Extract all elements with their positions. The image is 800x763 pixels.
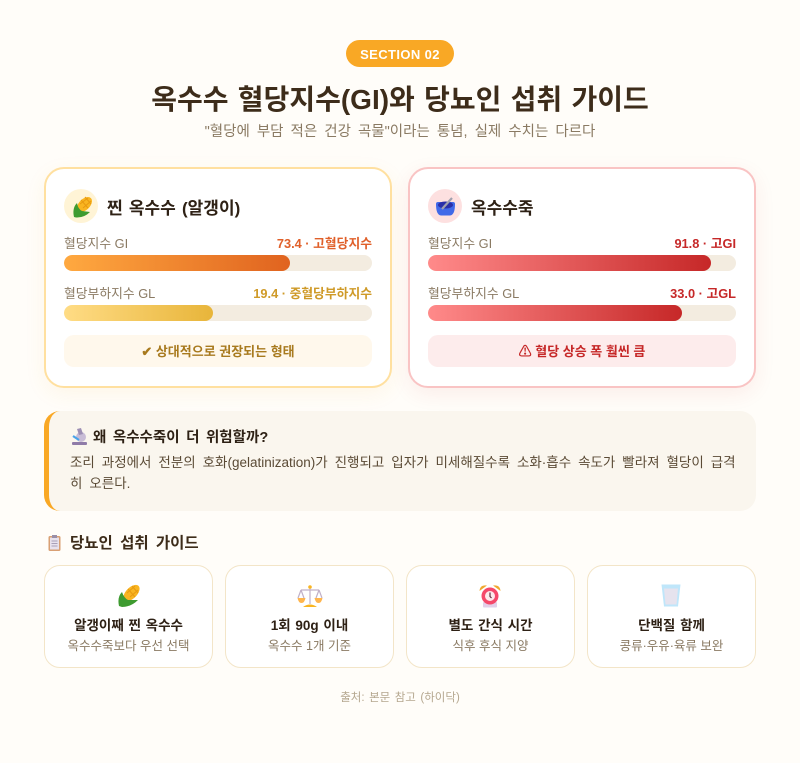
icon: corn bbox=[118, 584, 140, 607]
source note: 출처: 본문 참고 (하이닥) bbox=[340, 692, 460, 704]
GI bar bbox=[428, 255, 736, 271]
guide card: kernels bbox=[44, 565, 213, 668]
subtitle: "혈당에 부담 적은 건강 곡물"이라는 통념, 실제 수치는 다르다 bbox=[205, 124, 595, 140]
GL value: 19.4 · 중혈당부하지수 bbox=[253, 286, 372, 301]
icon: scale bbox=[298, 585, 322, 607]
section badge: SECTION 02 bbox=[360, 47, 440, 62]
panel background bbox=[408, 167, 756, 388]
guide card: snack time bbox=[406, 565, 575, 668]
callout heading: 왜 옥수수죽이 더 위험할까? bbox=[93, 430, 268, 446]
card title: 별도 간식 시간 bbox=[448, 618, 533, 633]
guide heading text: 당뇨인 섭취 가이드 bbox=[70, 535, 199, 552]
section badge bbox=[346, 40, 454, 67]
card note: 콩류·우유·육류 보완 bbox=[620, 639, 723, 653]
GL label: 혈당부하지수 GL bbox=[64, 286, 155, 301]
icon: glass of milk bbox=[662, 584, 680, 606]
verdict bbox=[64, 335, 372, 367]
GI label: 혈당지수 GI bbox=[428, 236, 492, 251]
panel background bbox=[44, 167, 392, 388]
verdict: ⚠ 혈당 상승 폭 훨씬 큼 bbox=[519, 344, 645, 359]
GL bar bbox=[64, 305, 372, 321]
GI value: 91.8 · 고GI bbox=[674, 236, 736, 251]
icon: clipboard bbox=[48, 535, 60, 551]
icon: alarm clock bbox=[480, 585, 500, 608]
GI value: 73.4 · 고혈당지수 bbox=[277, 236, 372, 251]
callout body: 조리 과정에서 전분의 호화(gelatinization)가 진행되고 입자가 미세해질수록 소화·흡수 속도가 빨라져 혈당이 급격히 오른다. bbox=[70, 455, 736, 491]
card note: 옥수수 1개 기준 bbox=[268, 639, 351, 653]
GL bar bbox=[428, 305, 736, 321]
card heading: 옥수수죽 bbox=[471, 199, 534, 218]
icon: bowl bbox=[428, 189, 462, 223]
icon: corn bbox=[64, 189, 98, 223]
title: 옥수수 혈당지수(GI)와 당뇨인 섭취 가이드 bbox=[151, 84, 649, 115]
GL value: 33.0 · 고GL bbox=[670, 286, 736, 301]
callout: why porridge is riskier bbox=[44, 411, 756, 511]
GI bar bbox=[64, 255, 372, 271]
card title: 알갱이째 찐 옥수수 bbox=[74, 618, 183, 633]
guide card: portion bbox=[225, 565, 394, 668]
card heading: 찐 옥수수 (알갱이) bbox=[107, 199, 240, 218]
card note: 식후 후식 지양 bbox=[453, 639, 528, 653]
panel: steamed corn kernels bbox=[44, 167, 392, 394]
guide card: protein bbox=[587, 565, 756, 668]
verdict: ✔ 상대적으로 권장되는 형태 bbox=[141, 344, 295, 359]
card note: 옥수수죽보다 우선 선택 bbox=[68, 639, 189, 653]
verdict bbox=[428, 335, 736, 367]
guide heading bbox=[48, 534, 199, 552]
GI label: 혈당지수 GI bbox=[64, 236, 128, 251]
panel: corn porridge bbox=[408, 167, 756, 393]
card title: 1회 90g 이내 bbox=[271, 618, 348, 633]
GL label: 혈당부하지수 GL bbox=[428, 286, 519, 301]
icon: microscope bbox=[72, 428, 87, 445]
card title: 단백질 함께 bbox=[638, 618, 705, 633]
